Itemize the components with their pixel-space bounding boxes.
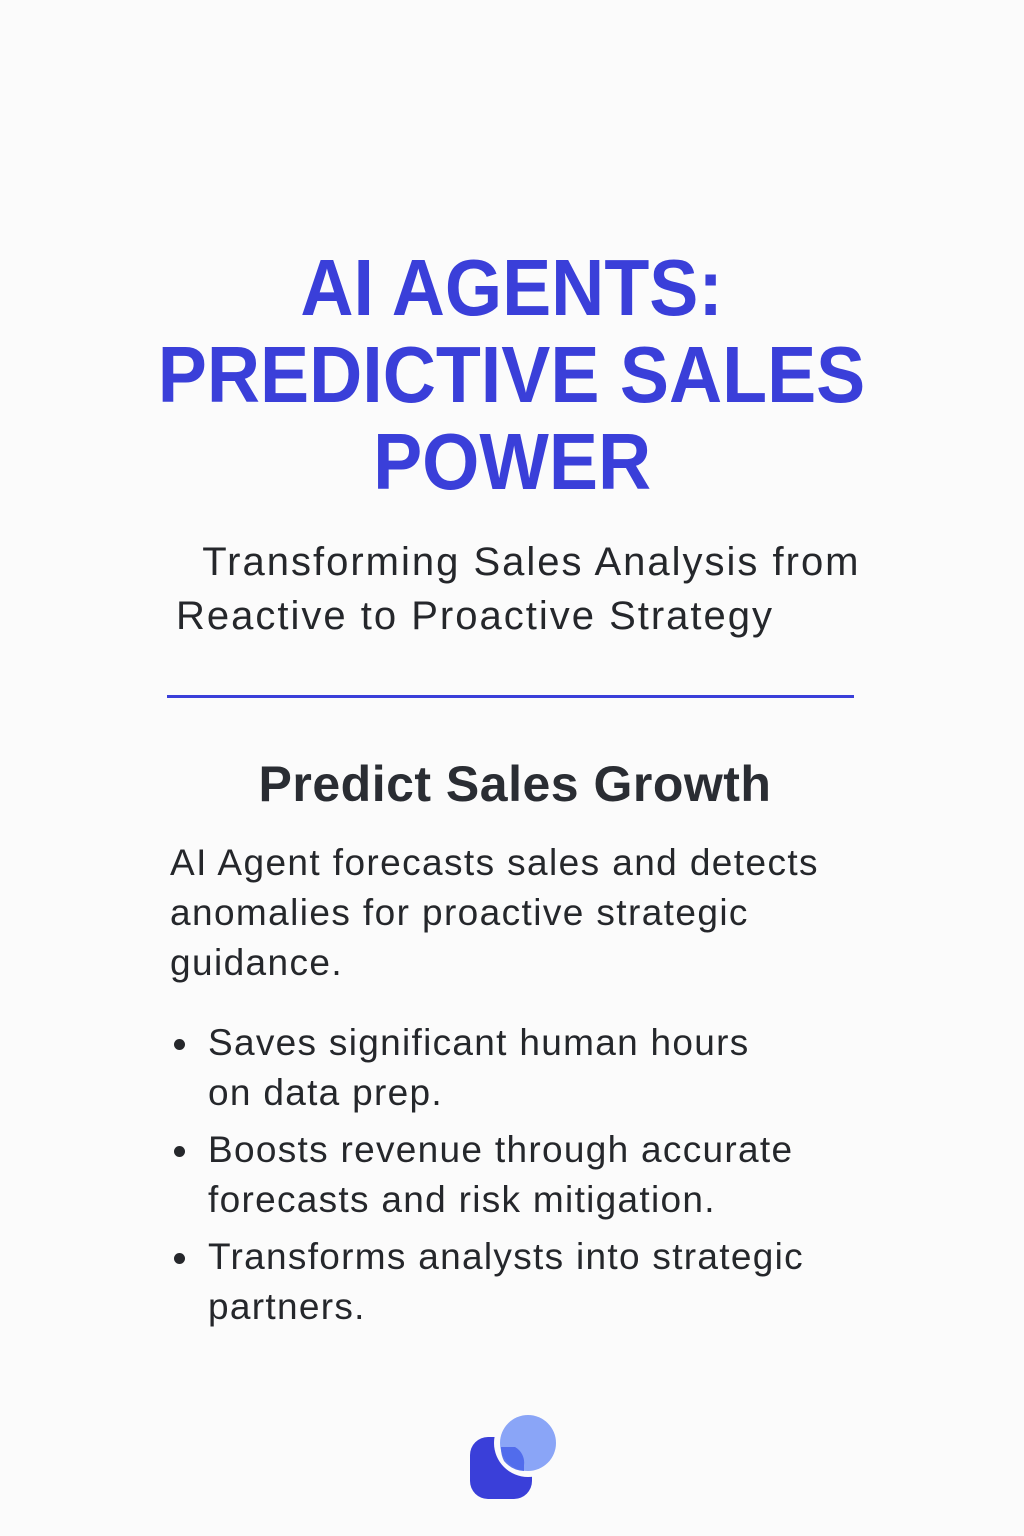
bullet list: Saves significant human hours — [208, 1022, 750, 1063]
description text: anomalies for proactive strategic — [170, 892, 749, 933]
bullet list — [174, 1022, 804, 1327]
subtitle: Transforming Sales Analysis from — [202, 540, 861, 584]
title — [158, 243, 866, 506]
subtitle: Reactive to Proactive Strategy — [176, 594, 774, 638]
description text — [170, 842, 819, 983]
section heading: Predict Sales Growth — [259, 756, 771, 812]
bullet list: Boosts revenue through accurate — [208, 1129, 793, 1170]
icon: logo — [470, 1415, 556, 1499]
subtitle — [176, 540, 861, 638]
bullet list: partners. — [208, 1286, 366, 1327]
bullet list: Transforms analysts into strategic — [208, 1236, 804, 1277]
title: PREDICTIVE SALES — [158, 330, 866, 419]
description text: guidance. — [170, 942, 343, 983]
title: POWER — [373, 417, 651, 506]
bullet list: forecasts and risk mitigation. — [208, 1179, 716, 1220]
bullet list: on data prep. — [208, 1072, 443, 1113]
divider line — [167, 695, 854, 698]
title: AI AGENTS: — [301, 243, 723, 332]
description text: AI Agent forecasts sales and detects — [170, 842, 819, 883]
